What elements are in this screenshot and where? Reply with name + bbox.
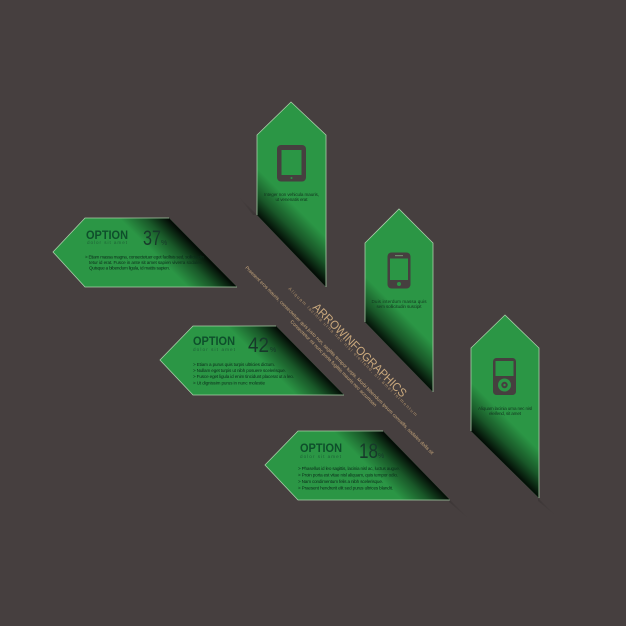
band shadows	[150, 196, 556, 520]
caption	[264, 192, 319, 202]
percentage: 18: 18	[359, 440, 378, 463]
caption: Integer non vehicula mauris,	[264, 192, 319, 197]
caption	[372, 299, 427, 309]
description line 2: Consectetur mi nunc porta fugittis mauris nec accumsan	[289, 319, 378, 408]
percentage: 37: 37	[143, 227, 161, 250]
icon: music player	[493, 358, 516, 395]
percentage: 42: 42	[248, 334, 269, 357]
panel: option 37% arrow	[53, 218, 237, 287]
panel: option 18% arrow	[265, 431, 450, 500]
bullet list: > Praesent hendrerit elit sed purus ultrices blandit.	[298, 486, 393, 490]
panel: tablet arrow	[257, 102, 326, 287]
subtitle: Aliquam lacinia urna nec nisl eleifend, sit amet fermentum	[287, 286, 418, 417]
bullet list: tetur id erat. Fusce in ante sit amet sapien viverra sodales.	[89, 260, 203, 265]
heading: option: OPTION	[300, 443, 342, 455]
bullet list: Quisque a bibendum ligula, id mattis sapien.	[89, 266, 170, 270]
bullet list: > Fusce eget ligula id enim tincidunt placerat ut a leo.	[193, 374, 294, 379]
bullet list: > Nullam eget turpis ut nibh posuere scelerisque.	[193, 368, 286, 373]
bullet list	[298, 466, 400, 490]
panel: option 42% arrow	[160, 326, 344, 395]
caption: Duis interdum massa quis	[372, 299, 427, 304]
percent sign: %	[270, 347, 276, 354]
caption: Aliquam lacinia urna nec nisl	[478, 406, 532, 411]
bullet list: > Nam condimentum felis a nibh scelerisque.	[298, 479, 383, 484]
bullet list: > Etiam a purus quis turpis ultricies dictum.	[193, 362, 275, 367]
panel: phone arrow	[365, 209, 433, 392]
description line 1: Praesent eros mauris, consectetuer quis justo non, sagittis tempor turpis. Morbi bibendum ipsum convallis, sodales dolla sit	[244, 265, 435, 457]
bullet list: > Ut dignissim purus in nunc molestie	[193, 380, 265, 386]
icon: tablet	[277, 145, 306, 182]
banner: diagonal title band	[244, 265, 435, 457]
subheading: dolor sit amet	[193, 347, 236, 352]
bullet list	[85, 254, 204, 270]
title: ARROWINFOGRAPHICS	[310, 300, 410, 400]
percent sign: %	[161, 240, 167, 247]
caption: eleifend, sit amet	[489, 411, 522, 416]
bullet list: > Etiam massa magna, consectetuer eget facilisis sed, sollicitudin	[85, 254, 204, 260]
bullet list	[193, 362, 294, 386]
bullet list: > Phasellus id leo sagittis, lacinia nisl ac, luctus augue.	[298, 466, 400, 471]
caption: sem sollicitudin suscipit	[376, 304, 422, 309]
icon: phone	[388, 252, 410, 288]
heading: option: OPTION	[86, 230, 128, 242]
bullet list: > Proin porta est vitae nisl aliquam, quis tempor odio.	[298, 472, 398, 478]
caption	[478, 406, 532, 416]
heading: option: OPTION	[193, 336, 235, 348]
caption: ut venenatis erat	[276, 197, 308, 202]
subheading: dolor sit amet	[87, 240, 128, 245]
panel: music player arrow	[471, 315, 539, 498]
percent sign: %	[378, 453, 384, 460]
subheading: dolor sit amet	[300, 454, 342, 459]
